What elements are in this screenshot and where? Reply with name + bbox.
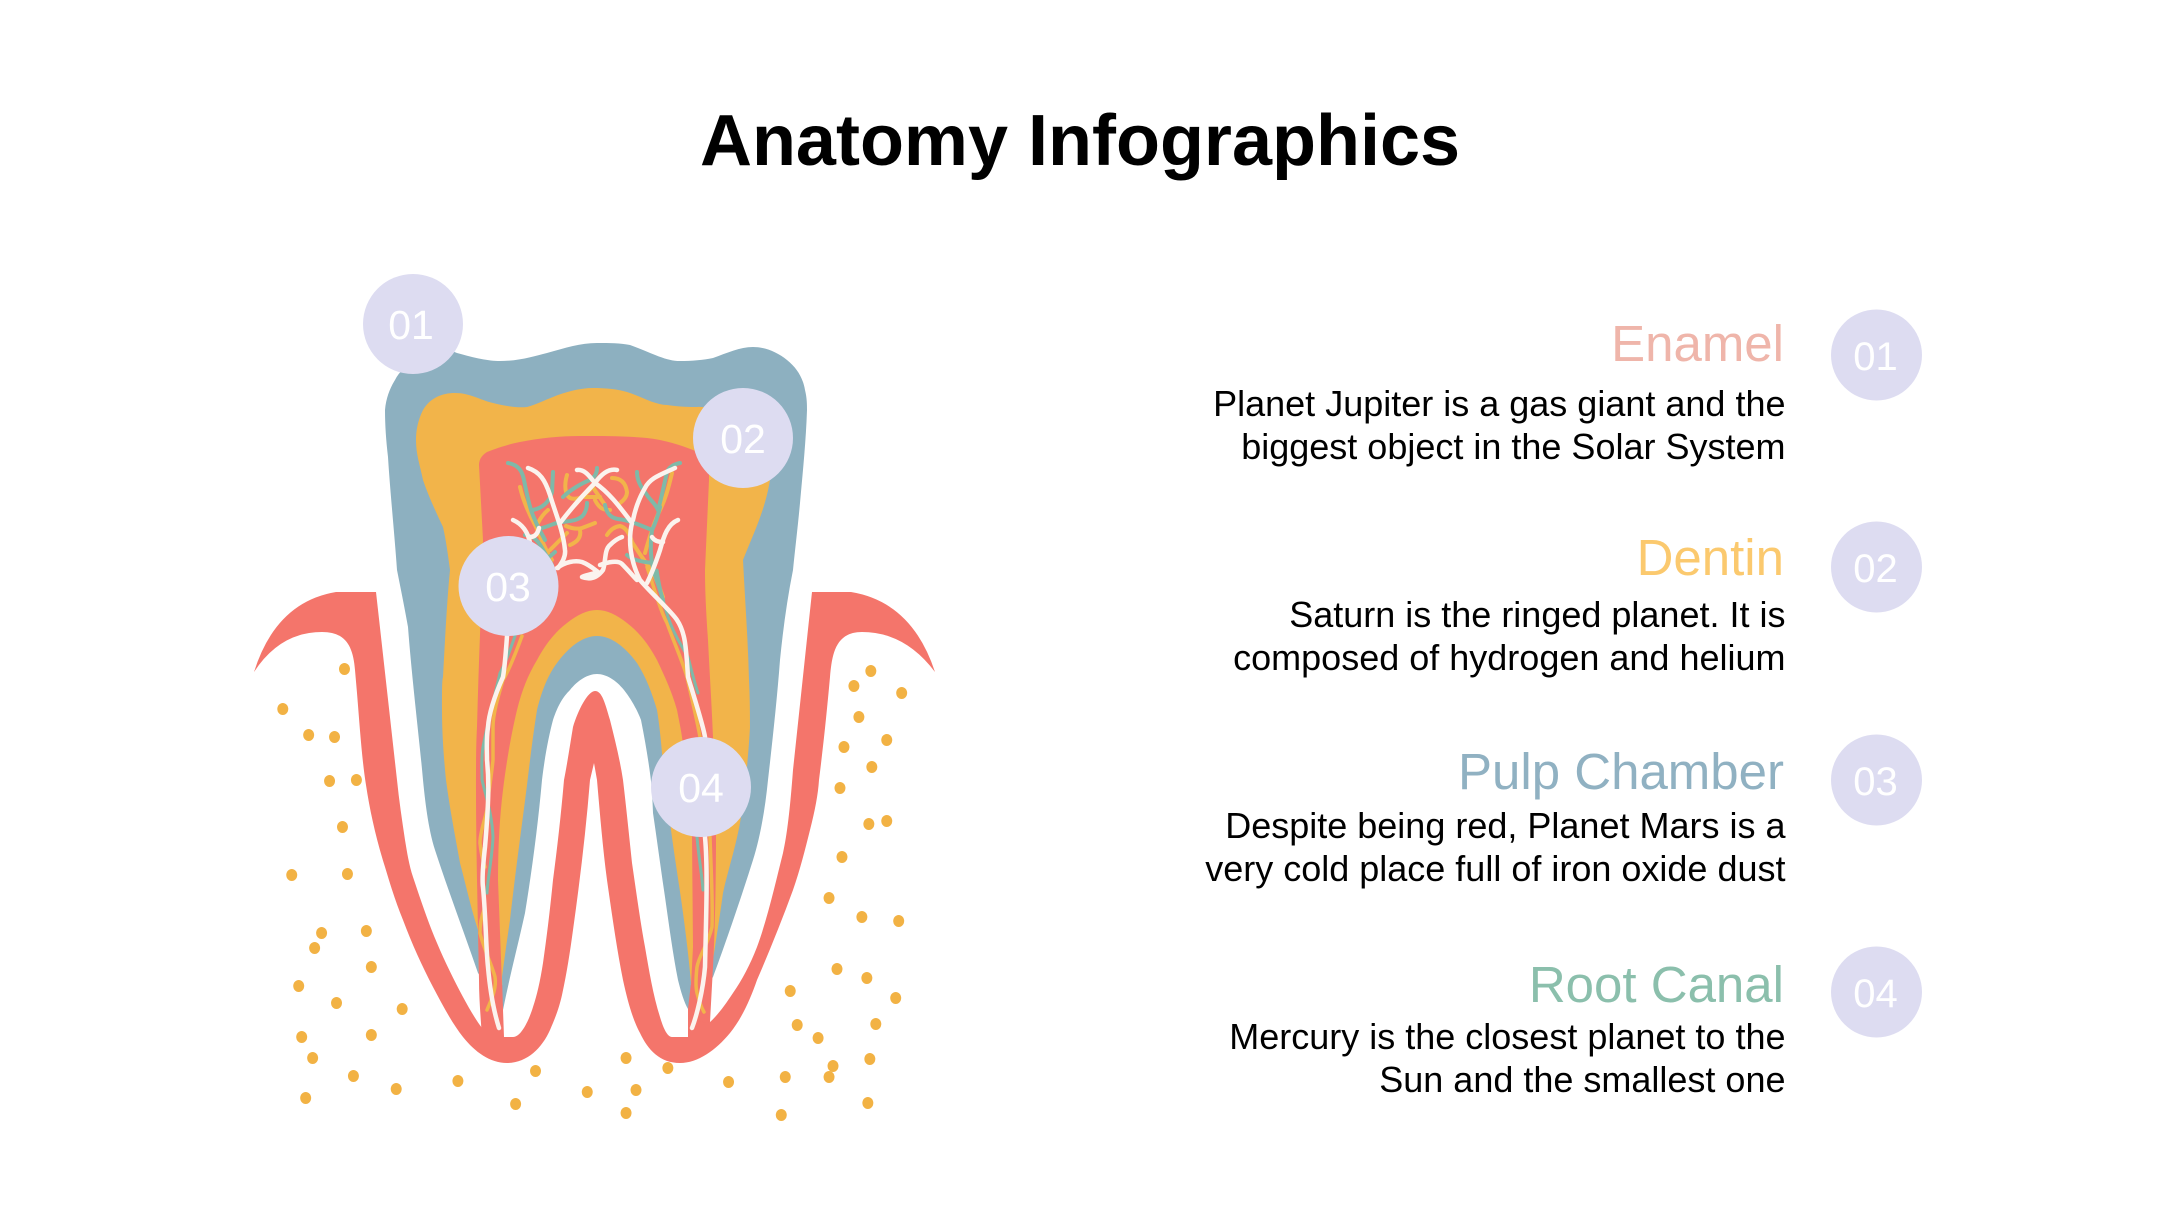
- bone dots: [277, 663, 907, 1121]
- description: Sun and the smallest one: [1379, 1059, 1786, 1100]
- pulp chamber: [476, 436, 716, 1040]
- description: composed of hydrogen and helium: [1233, 637, 1786, 678]
- description: Saturn is the ringed planet. It is: [1289, 594, 1786, 635]
- description: Planet Jupiter is a gas giant and the: [1213, 383, 1786, 424]
- inner blue arch: [502, 636, 691, 1010]
- yellow nerves: [480, 473, 712, 1012]
- heading: Pulp Chamber: [1458, 743, 1784, 800]
- number badge: 02: [1853, 547, 1898, 591]
- marker 02: 02: [720, 416, 766, 462]
- marker 04: 04: [678, 765, 724, 811]
- gum band: [254, 592, 935, 1063]
- number badge: [1831, 522, 1922, 612]
- marker 01: 01: [388, 302, 434, 348]
- number badge: [1831, 734, 1922, 826]
- number badge: 01: [1853, 335, 1898, 379]
- title: Anatomy Infographics: [700, 101, 1460, 181]
- number badge: [1831, 310, 1922, 400]
- marker 01: [363, 274, 463, 374]
- heading: Root Canal: [1529, 956, 1784, 1013]
- item: Dentin: [1233, 522, 1922, 678]
- number badge: [1831, 946, 1922, 1038]
- description: Despite being red, Planet Mars is a: [1225, 805, 1786, 846]
- teal nerves: [482, 463, 703, 893]
- heading: Dentin: [1637, 529, 1784, 586]
- inner white arch: [503, 674, 688, 1045]
- marker 02: [693, 388, 793, 488]
- marker 04: [651, 737, 751, 837]
- description: Mercury is the closest planet to the: [1229, 1016, 1786, 1057]
- white nerves: [483, 468, 707, 1028]
- item: Root Canal: [1229, 946, 1922, 1100]
- number badge: 03: [1853, 760, 1898, 804]
- inner yellow arch: [498, 610, 693, 985]
- item: Pulp Chamber: [1205, 734, 1922, 889]
- description: very cold place full of iron oxide dust: [1205, 848, 1786, 889]
- description: biggest object in the Solar System: [1241, 426, 1786, 467]
- outer blue layer: [385, 343, 807, 1009]
- item: Enamel: [1213, 310, 1922, 467]
- number badge: 04: [1853, 972, 1898, 1016]
- marker 03: 03: [485, 564, 531, 610]
- yellow layer: [416, 388, 770, 990]
- marker 03: [458, 536, 558, 636]
- tooth diagram: [254, 274, 935, 1121]
- heading: Enamel: [1611, 315, 1784, 372]
